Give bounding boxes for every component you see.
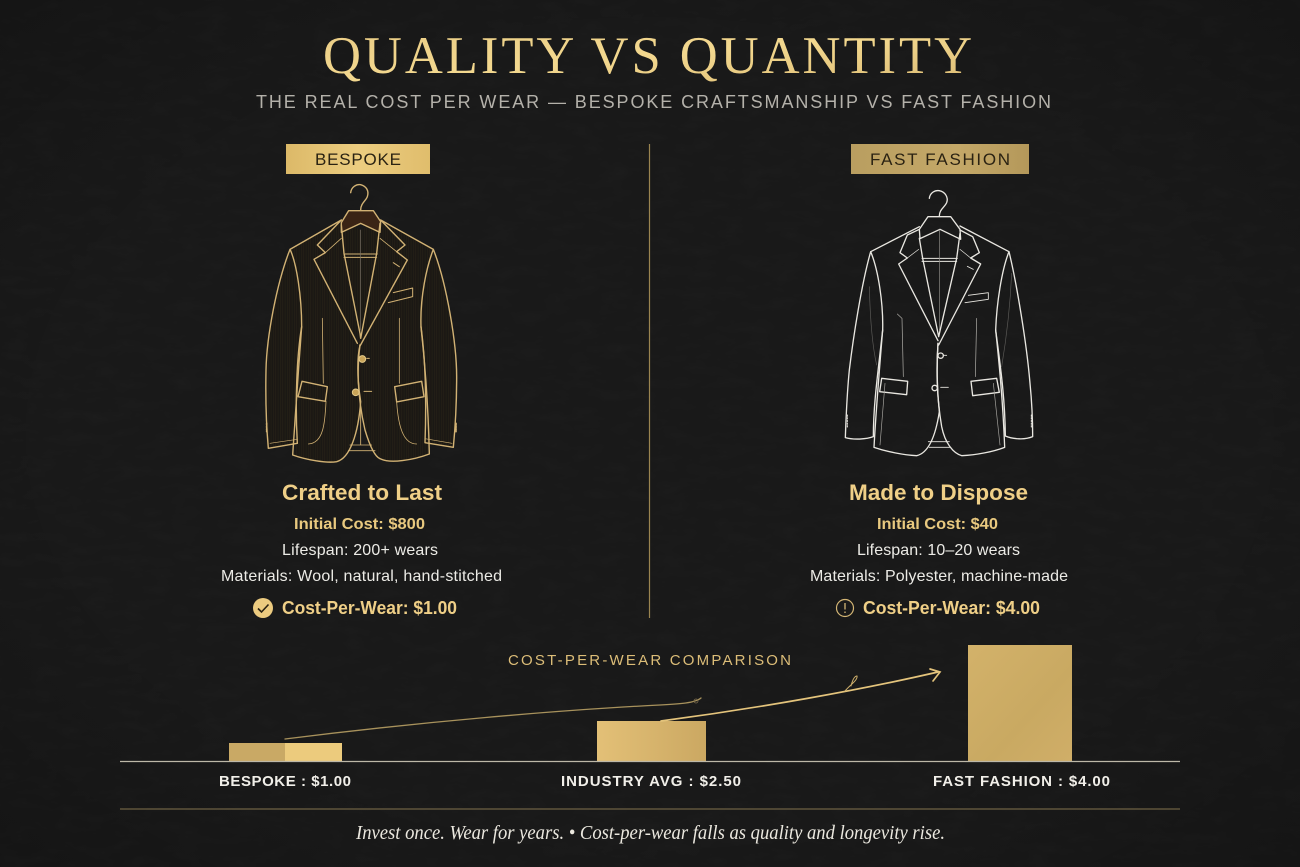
icon: bespoke jacket on hanger	[266, 185, 457, 462]
bar: fast fashion	[968, 645, 1072, 761]
bar chart: cost-per-wear comparison	[120, 645, 1180, 790]
label: fast fashion: FAST FASHION : $4.00	[933, 773, 1110, 790]
text: materials: Materials: Polyester, machine-made	[810, 568, 1068, 585]
chart title: COST-PER-WEAR COMPARISON	[508, 652, 791, 669]
arrow: rising trend	[285, 669, 940, 739]
text: cost per wear fast fashion: Cost-Per-Wear: $4.00	[863, 598, 1040, 618]
text: materials: Materials: Wool, natural, hand-stitched	[221, 568, 502, 585]
subtitle: THE REAL COST PER WEAR — BESPOKE CRAFTSMANSHIP VS FAST FASHION	[256, 92, 1051, 112]
label: bespoke: BESPOKE : $1.00	[219, 773, 351, 790]
panel: fast fashion	[810, 144, 1068, 618]
center divider	[648, 144, 650, 618]
text: cost per wear bespoke: Cost-Per-Wear: $1.00	[282, 598, 457, 618]
text: initial cost: Initial Cost: $800	[294, 516, 425, 533]
heading: crafted to last: Crafted to Last	[282, 480, 443, 505]
text: lifespan: Lifespan: 10–20 wears	[857, 542, 1020, 559]
badge: fast fashion: FAST FASHION	[870, 150, 1010, 169]
title: QUALITY VS QUANTITY	[323, 27, 975, 85]
badge: fast fashion	[851, 144, 1029, 174]
bar: industry average	[597, 721, 706, 761]
footer tagline: Invest once. Wear for years. • Cost-per-wear falls as quality and longevity rise.	[355, 822, 945, 844]
label: industry average: INDUSTRY AVG : $2.50	[561, 773, 741, 790]
bar: bespoke	[229, 743, 342, 761]
badge: bespoke: BESPOKE	[315, 150, 401, 169]
text: initial cost: Initial Cost: $40	[877, 516, 998, 533]
panel: bespoke	[221, 144, 502, 618]
chart baseline	[120, 760, 1180, 762]
icon: fast fashion jacket on hanger	[845, 191, 1033, 456]
icon: warning	[836, 600, 854, 616]
icon: check	[253, 598, 273, 618]
heading: made to dispose: Made to Dispose	[849, 480, 1028, 505]
footer divider	[120, 808, 1180, 810]
text: lifespan: Lifespan: 200+ wears	[282, 542, 438, 559]
badge: bespoke	[286, 144, 430, 174]
